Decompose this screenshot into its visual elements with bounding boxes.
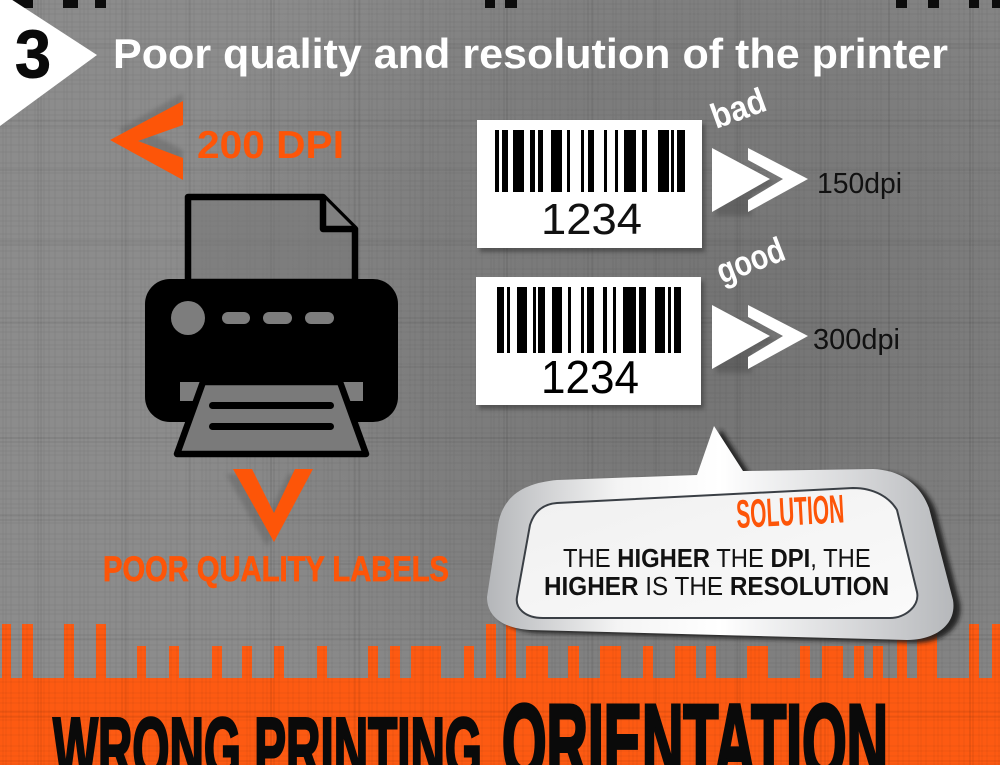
printed lines	[209, 402, 334, 430]
double arrow: 150dpi	[712, 148, 808, 216]
150dpi label: 150dpi	[817, 168, 902, 200]
callout shadow	[494, 429, 960, 643]
down chevron arrow	[226, 469, 313, 547]
double arrow: 300dpi	[712, 305, 808, 373]
printer indicator lights	[180, 312, 363, 401]
300dpi label: 300dpi	[813, 324, 900, 356]
solution heading: SOLUTION	[735, 487, 845, 537]
solution text: HIGHER IS THE RESOLUTION	[544, 572, 889, 601]
callout body	[487, 426, 953, 640]
number badge	[0, 0, 97, 126]
200 DPI label: 200 DPI	[197, 124, 344, 167]
sheet fold	[323, 197, 355, 229]
top barcode fragments	[0, 0, 1000, 8]
orange barcode band	[0, 624, 1000, 765]
solution text	[544, 544, 889, 601]
printer button	[171, 301, 205, 335]
printer body	[145, 279, 398, 422]
bad barcode label	[477, 120, 705, 252]
printer top sheet	[188, 197, 355, 282]
printer icon	[145, 197, 398, 454]
printed sheet	[177, 382, 366, 454]
less-than arrow	[110, 93, 183, 180]
bad label: bad	[705, 81, 771, 137]
poor quality labels: POOR QUALITY LABELS	[103, 550, 449, 589]
callout inner panel	[517, 488, 917, 618]
barcode number: 1234	[541, 195, 642, 244]
bars	[497, 287, 681, 353]
bars	[495, 130, 685, 192]
number badge: 3	[15, 16, 51, 92]
good barcode label	[476, 277, 704, 409]
good label: good	[711, 230, 790, 291]
barcode number: 1234	[541, 351, 639, 403]
solution callout	[487, 426, 960, 643]
title: Poor quality and resolution of the printer	[113, 30, 948, 77]
solution text: THE HIGHER THE DPI, THE	[563, 544, 871, 573]
